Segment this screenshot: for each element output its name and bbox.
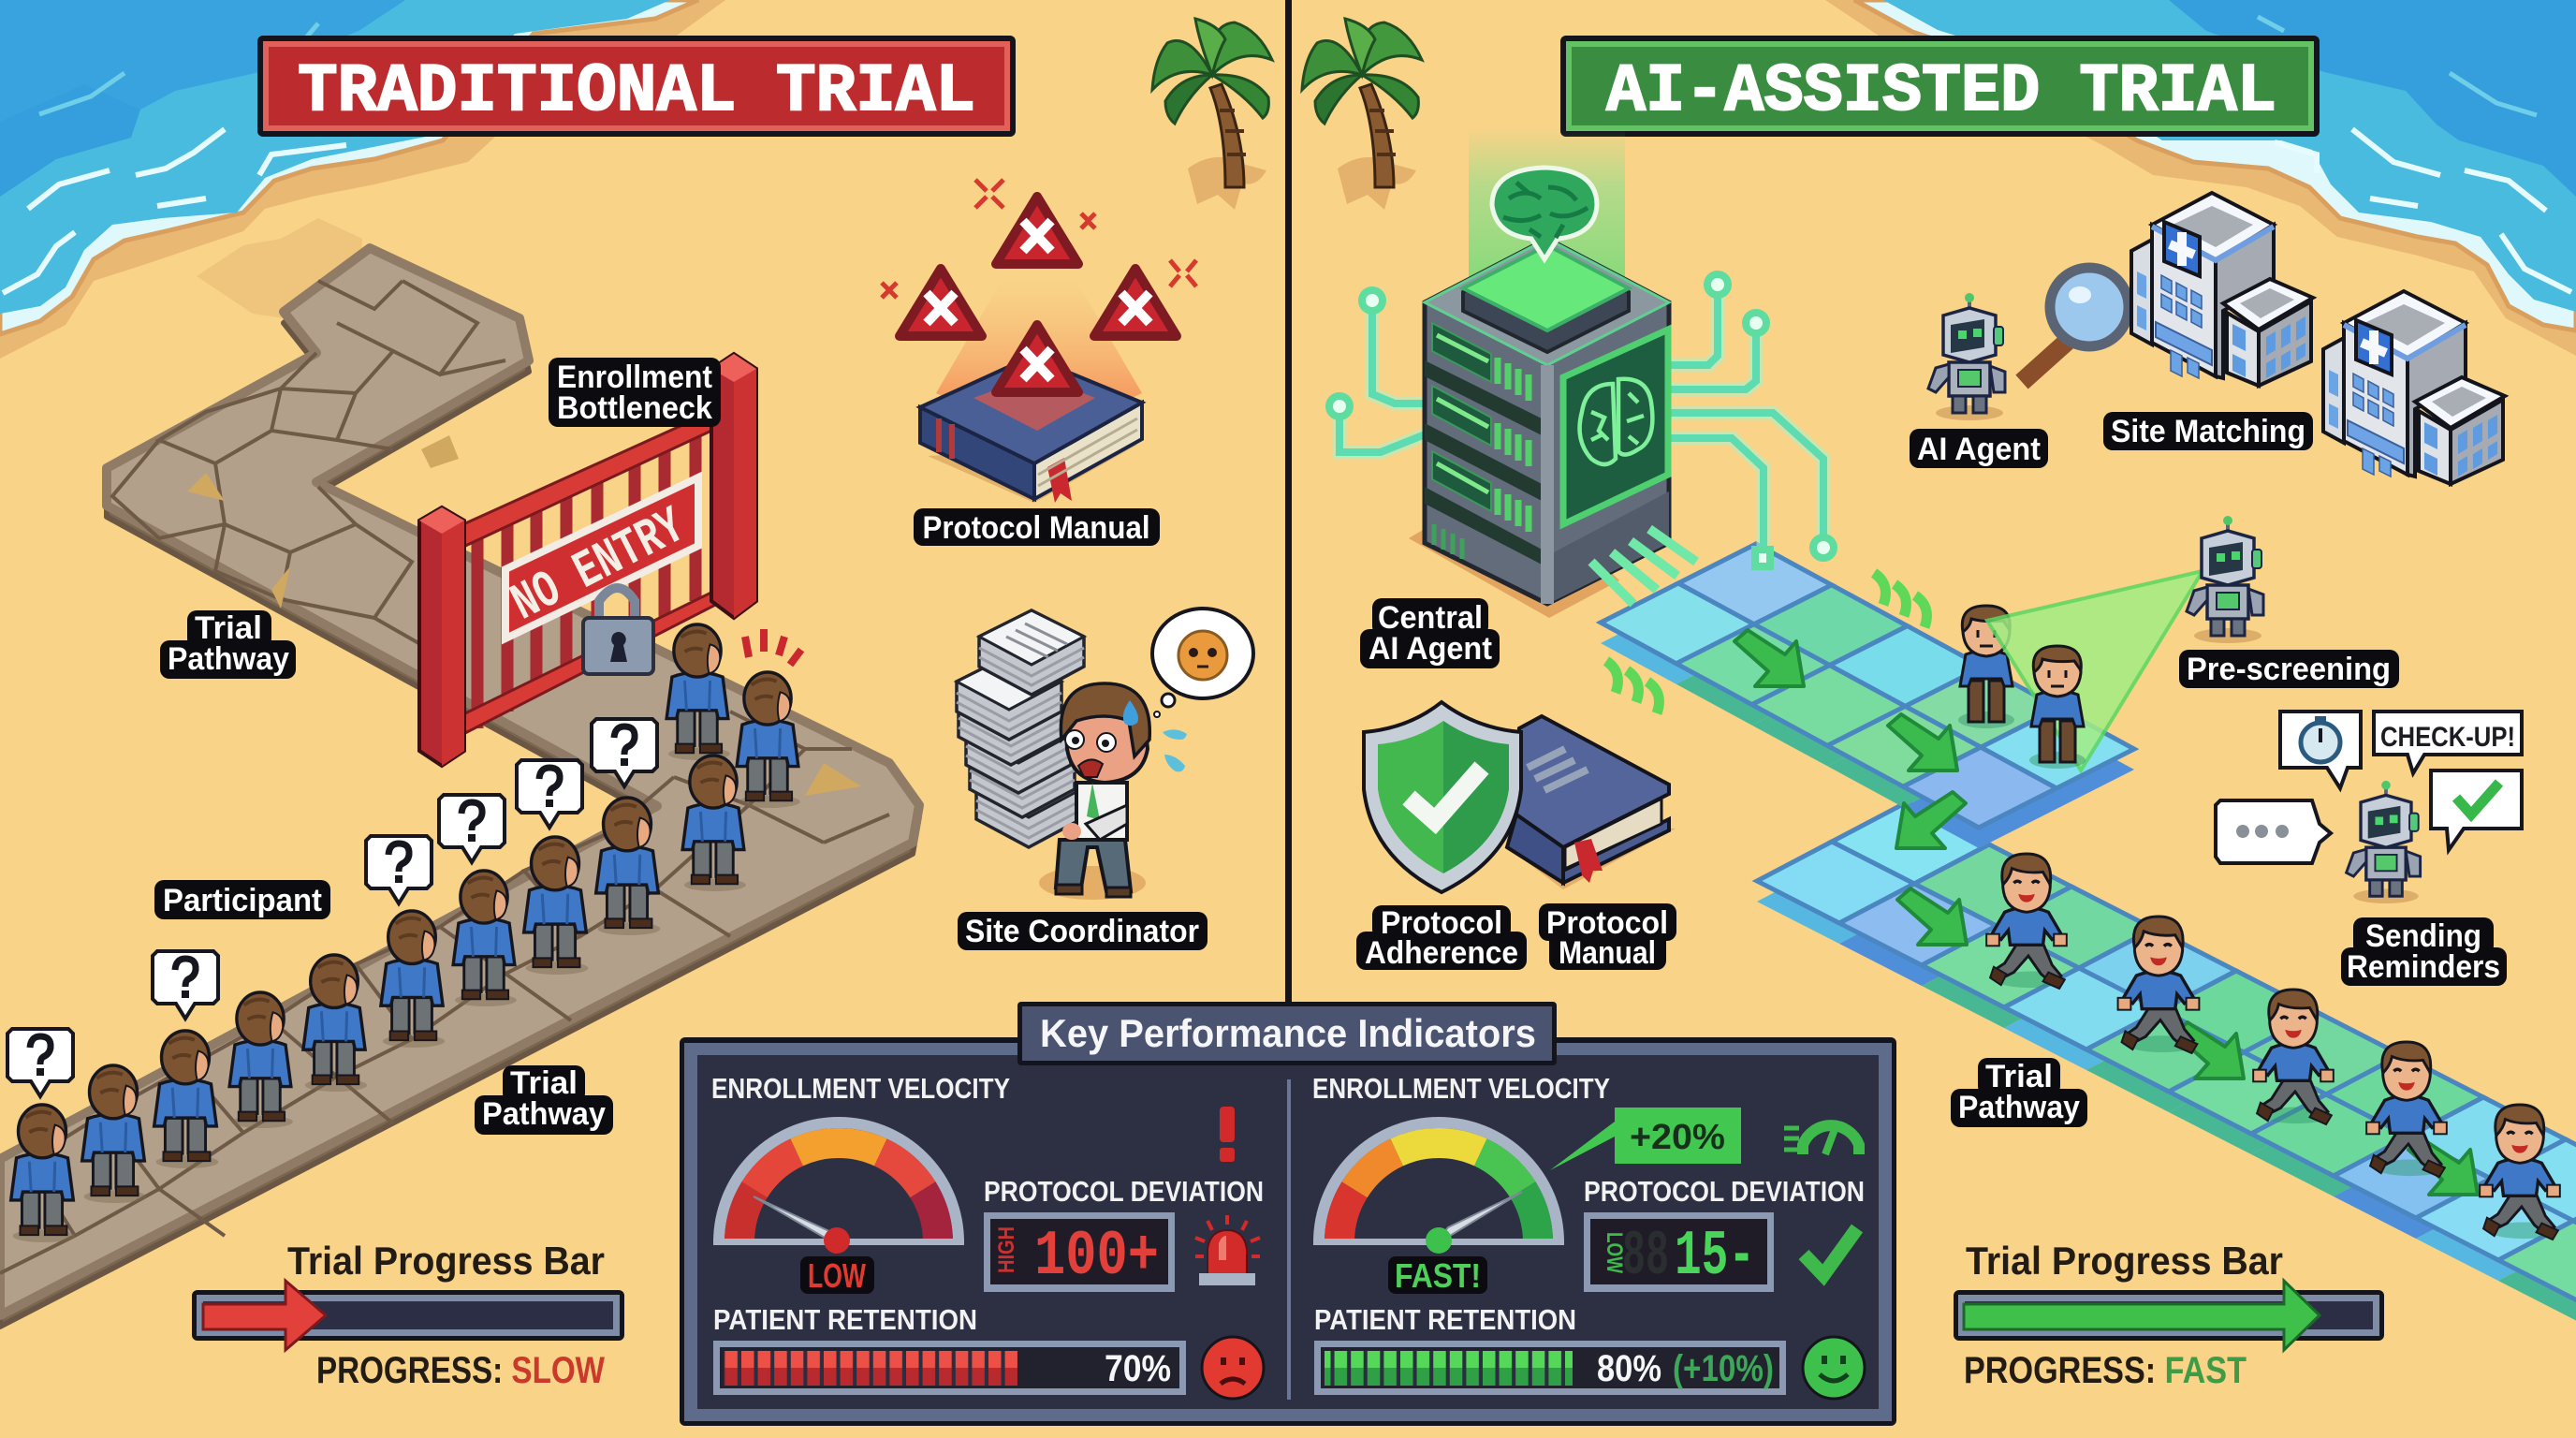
siren icon <box>1195 1215 1260 1285</box>
banner: AI-assisted trial <box>1560 36 2320 137</box>
triangles <box>996 197 1078 264</box>
red display: HIGH <box>994 1226 1019 1273</box>
green display: 88 <box>1622 1221 1669 1293</box>
server body <box>1425 239 1669 604</box>
tile pathway <box>1601 544 2576 1323</box>
label: central AI agent: AI Agent <box>1368 631 1492 667</box>
trial progress bar: slow <box>192 1239 624 1391</box>
moving participants <box>1986 854 2560 1240</box>
label: pre-screening: Pre-screening <box>2187 652 2391 687</box>
sad face <box>1202 1337 1264 1399</box>
cables to tiles <box>1591 529 1696 604</box>
sand scar <box>197 218 362 318</box>
book <box>1507 716 1676 889</box>
patient retention label: PATIENT RETENTION <box>1314 1303 1576 1336</box>
label: enrollment bottleneck: Enrollment <box>557 360 712 395</box>
protocol deviation label: PROTOCOL DEVIATION <box>1584 1175 1865 1208</box>
sparks <box>882 180 1196 298</box>
green retention bar <box>1314 1341 1786 1395</box>
screened participants <box>1958 571 2203 770</box>
sign text: NO ENTRY <box>502 496 695 634</box>
guide arrows <box>1734 630 1804 686</box>
title text: AI-ASSISTED TRIAL <box>1606 53 2276 130</box>
dots bubble <box>2216 800 2331 863</box>
queue of participants <box>7 624 801 1242</box>
red display: 100+ <box>1034 1221 1159 1293</box>
thought bubble <box>1152 609 1253 717</box>
gate: enrollment bottleneck <box>419 354 756 766</box>
top rail <box>463 412 711 547</box>
icon: palm tree right <box>1302 19 1422 210</box>
hospitals: site matching <box>2131 193 2505 484</box>
pre-screening robot <box>2187 516 2263 643</box>
happy face <box>1803 1337 1865 1399</box>
alarm marks <box>745 629 801 665</box>
label: participant: Participant <box>163 883 322 918</box>
stone trial pathway <box>0 218 919 1327</box>
label: enrollment bottleneck: Bottleneck <box>557 390 712 426</box>
track <box>192 1290 624 1341</box>
AI agent with magnifier <box>1928 268 2129 420</box>
left post <box>419 507 464 766</box>
status: PROGRESS: SLOW <box>316 1350 605 1391</box>
label: trial pathway upper: Pathway <box>168 641 289 677</box>
label: sending reminders: Sending <box>2365 918 2481 954</box>
label: trial pathway right: Trial <box>1985 1059 2053 1094</box>
green retention bar: 80% <box>1597 1348 1661 1389</box>
label: AI agent: AI Agent <box>1917 432 2041 467</box>
patient retention label: PATIENT RETENTION <box>713 1303 977 1336</box>
label: trial pathway right <box>1951 1058 2087 1127</box>
site coordinator with paper stack <box>957 609 1253 900</box>
title text: TRADITIONAL TRIAL <box>298 53 975 130</box>
circuit traces <box>1339 295 1823 548</box>
label: trial pathway lower <box>475 1065 613 1135</box>
upper leg tile sides <box>1601 565 2134 848</box>
coordinator <box>1039 683 1149 900</box>
heading: Trial Progress Bar <box>1966 1239 2283 1283</box>
right post <box>711 354 756 618</box>
label: protocol manual right: Manual <box>1559 935 1656 971</box>
panel frame <box>680 1037 1896 1426</box>
scan beam <box>1987 571 2203 770</box>
server left blades <box>1425 323 1547 567</box>
protocol adherence shield and manual <box>1364 702 1676 892</box>
+20% callout: +20% <box>1630 1118 1725 1157</box>
label: site coordinator: Site Coordinator <box>965 914 1199 949</box>
heading: Trial Progress Bar <box>287 1239 605 1283</box>
speedometer icon <box>1784 1124 1859 1154</box>
center divider <box>1285 0 1292 1011</box>
green beam and AI server <box>1329 128 1834 618</box>
label: trial pathway upper: Trial <box>195 610 262 646</box>
glow <box>936 281 1142 440</box>
server front corner <box>1541 365 1554 604</box>
warning triangles and protocol manual <box>882 180 1196 503</box>
FAST tag: FAST! <box>1395 1256 1481 1295</box>
label: trial pathway upper <box>160 610 296 679</box>
+20% callout <box>1550 1108 1741 1170</box>
protocol deviation label: PROTOCOL DEVIATION <box>984 1175 1264 1208</box>
label: site matching: Site Matching <box>2111 414 2305 449</box>
label: protocol manual right <box>1539 903 1676 971</box>
green display: LOW <box>1602 1232 1627 1273</box>
exclamation icon <box>1220 1107 1235 1162</box>
server shadow <box>1409 524 1619 618</box>
label: sending reminders <box>2341 917 2507 986</box>
banner: traditional trial <box>257 36 1016 137</box>
tab text: Key Performance Indicators <box>1040 1011 1536 1055</box>
arrow <box>1964 1281 2320 1350</box>
bottom rail <box>463 585 726 734</box>
label: trial pathway right: Pathway <box>1958 1090 2080 1125</box>
floating brain <box>1492 168 1597 259</box>
label: sending reminders: Reminders <box>2347 949 2500 985</box>
book <box>920 357 1142 503</box>
red retention bar <box>713 1341 1186 1395</box>
KPI panel <box>680 1002 1896 1426</box>
green retention bar: (+10%) <box>1673 1348 1774 1389</box>
green display: 15- <box>1675 1221 1755 1293</box>
no entry sign <box>505 477 698 638</box>
right gauge <box>1313 1123 1564 1254</box>
label: protocol manual: Protocol Manual <box>923 510 1149 546</box>
padlock <box>583 588 653 674</box>
label: protocol adherence: Adherence <box>1365 935 1518 971</box>
label: enrollment bottleneck <box>549 358 721 427</box>
top plate <box>1463 248 1629 352</box>
green display <box>1584 1212 1774 1293</box>
label: trial pathway lower: Trial <box>510 1065 578 1101</box>
check icon <box>1804 1228 1857 1275</box>
arrow <box>203 1281 326 1350</box>
upper leg tiles <box>1601 544 2134 828</box>
red display <box>984 1212 1175 1293</box>
icon: palm tree left <box>1152 19 1272 210</box>
lower leg tiles <box>1757 802 2576 1302</box>
paper stack <box>957 610 1084 847</box>
check-up bubble <box>2374 712 2522 773</box>
beam <box>1469 128 1625 297</box>
tab <box>1017 1002 1557 1065</box>
label: central AI agent: Central <box>1378 600 1483 636</box>
right column: enrollment velocity label: ENROLLMENT VELOCITY <box>1312 1072 1610 1105</box>
left gauge <box>713 1123 964 1254</box>
red retention bar: 70% <box>1105 1348 1171 1389</box>
status: PROGRESS: FAST <box>1964 1350 2247 1391</box>
server right base <box>1554 492 1669 601</box>
gate bars <box>477 426 695 728</box>
shield <box>1364 702 1521 892</box>
left sea and shoreline <box>0 0 725 359</box>
right sea and shoreline <box>1825 0 2576 356</box>
lower leg tile sides <box>1757 862 2576 1323</box>
sweat drops <box>1163 729 1187 771</box>
left column: enrollment velocity label: ENROLLMENT VELOCITY <box>711 1072 1010 1105</box>
label: protocol adherence: Protocol <box>1381 905 1502 941</box>
reminder robot with speech bubbles <box>2216 712 2522 903</box>
brain on screen <box>1580 379 1652 464</box>
label: protocol adherence <box>1356 905 1527 971</box>
chevrons <box>1606 573 1926 713</box>
label: central AI agent <box>1360 598 1500 668</box>
question bubbles <box>7 1029 73 1096</box>
label: trial pathway lower: Pathway <box>482 1096 606 1132</box>
LOW tag: LOW <box>808 1256 866 1295</box>
AI screen <box>1563 330 1668 524</box>
check-up bubble: CHECK-UP! <box>2380 722 2515 753</box>
label: protocol manual right: Protocol <box>1546 905 1668 941</box>
check bubble <box>2431 770 2522 850</box>
stopwatch bubble <box>2280 712 2361 788</box>
divider <box>1287 1079 1291 1400</box>
server top face <box>1425 239 1669 365</box>
trial progress bar: fast <box>1954 1239 2384 1391</box>
track <box>1954 1290 2384 1341</box>
magnifier <box>2022 342 2067 382</box>
